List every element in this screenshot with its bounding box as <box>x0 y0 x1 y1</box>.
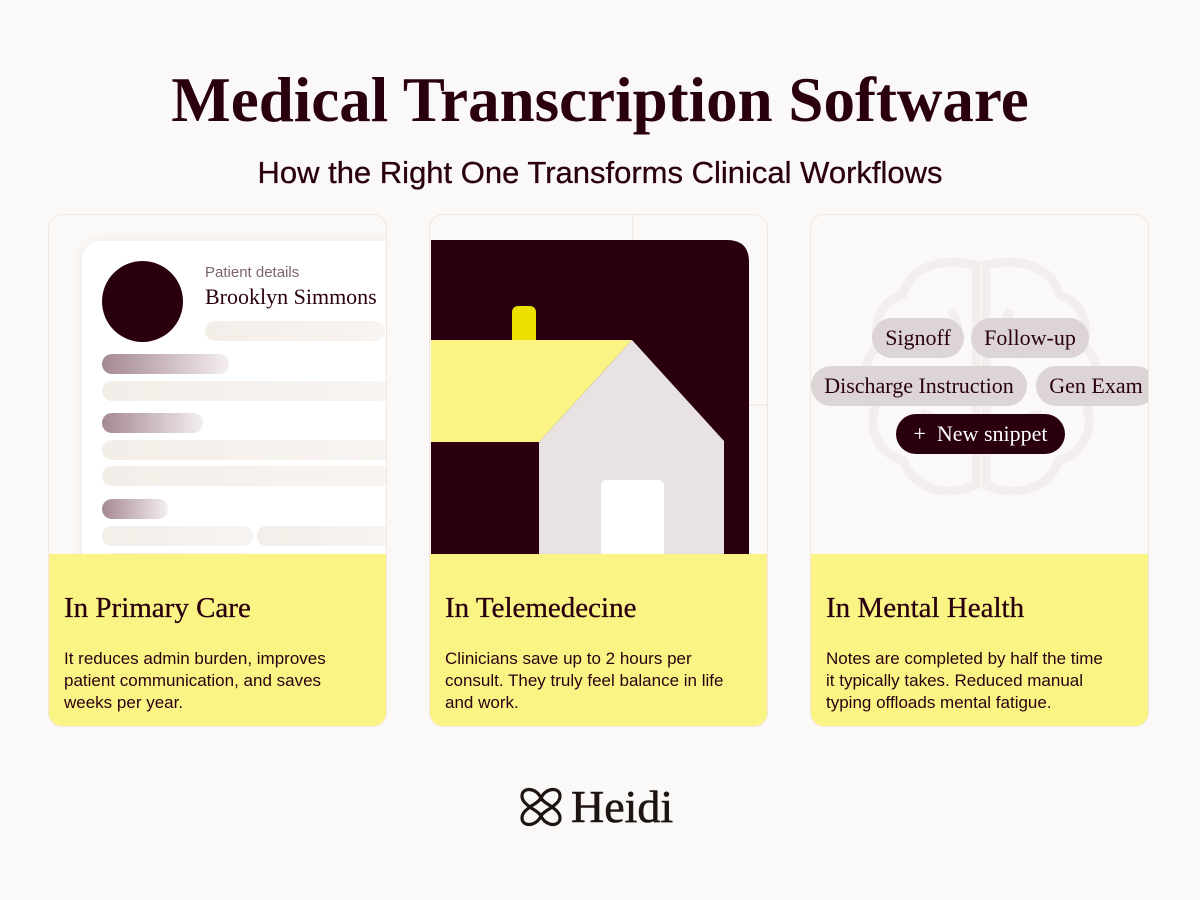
house illustration <box>431 240 749 554</box>
snippet chips: Discharge Instruction <box>824 373 1014 398</box>
text: mental health <box>811 554 1148 728</box>
logo text: Heidi <box>571 781 673 832</box>
logo: Heidi <box>520 781 673 832</box>
panel: primary care <box>48 214 387 727</box>
title: Medical Transcription Software <box>171 65 1029 135</box>
text: primary care: In Primary Care <box>64 592 251 624</box>
snippet chips: Gen Exam <box>1049 373 1143 398</box>
text: telemedicine: In Telemedecine <box>445 592 636 624</box>
icon: brain outline <box>862 258 1100 496</box>
patient name: Brooklyn Simmons <box>205 284 377 309</box>
text: mental health: In Mental Health <box>826 592 1024 624</box>
text: telemedicine <box>430 554 767 728</box>
snippet chips: Follow-up <box>984 325 1076 350</box>
panel: mental health <box>810 214 1149 727</box>
text: primary care: It reduces admin burden, improves patient communication, and saves weeks per year. <box>64 649 326 712</box>
text: primary care <box>49 554 386 728</box>
subtitle: How the Right One Transforms Clinical Workflows <box>257 155 943 190</box>
text: mental health: Notes are completed by half the time it typically takes. Reduced manual typing offloads mental fatigue. <box>826 649 1103 712</box>
text: telemedicine: Clinicians save up to 2 hours per consult. They truly feel balance in life and work. <box>445 649 723 712</box>
icon: logo mark <box>520 788 562 826</box>
snippet chips: Signoff <box>885 325 951 350</box>
snippet chips <box>811 318 1148 454</box>
panel: telemedicine <box>429 214 768 727</box>
patient details card <box>82 241 402 571</box>
avatar <box>102 261 183 342</box>
snippet chips: + New snippet <box>914 421 1048 446</box>
patient label: Patient details <box>205 264 299 281</box>
